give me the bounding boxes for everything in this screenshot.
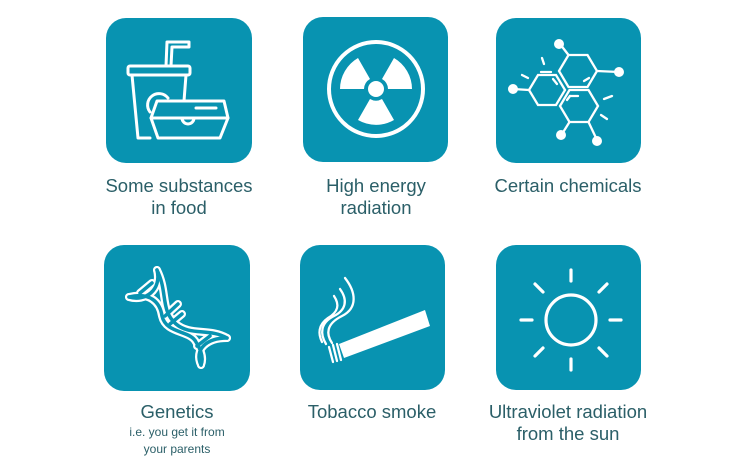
- icon: DNA: [129, 270, 227, 365]
- panel: genetics: [104, 245, 250, 391]
- icon: radiation: [329, 42, 423, 136]
- label: food: in food: [151, 197, 207, 218]
- label: UV: Ultraviolet radiation: [489, 401, 647, 422]
- icon: cigarette: [320, 278, 430, 362]
- label: chemicals: Certain chemicals: [494, 175, 642, 196]
- label: genetics: Genetics: [140, 401, 214, 422]
- label: genetics: i.e. you get it from: [129, 425, 225, 439]
- icon: sun: [521, 270, 621, 370]
- panel: UV: [496, 245, 641, 390]
- label: tobacco: Tobacco smoke: [308, 401, 436, 422]
- label: genetics: [129, 401, 225, 456]
- label: radiation: [326, 175, 427, 218]
- label: UV: from the sun: [517, 423, 619, 444]
- label: food: [105, 175, 253, 218]
- label: radiation: radiation: [341, 197, 411, 218]
- icon: molecule: [513, 44, 619, 140]
- panel: tobacco: [300, 245, 445, 390]
- label: UV: [489, 401, 647, 444]
- panel: food: [106, 18, 252, 163]
- label: food: Some substances: [105, 175, 253, 196]
- icon: drink and food box: [128, 42, 228, 138]
- panel: chemicals: [496, 18, 641, 163]
- panel: radiation: [303, 17, 448, 162]
- label: radiation: High energy: [326, 175, 427, 196]
- label: genetics: your parents: [144, 442, 210, 456]
